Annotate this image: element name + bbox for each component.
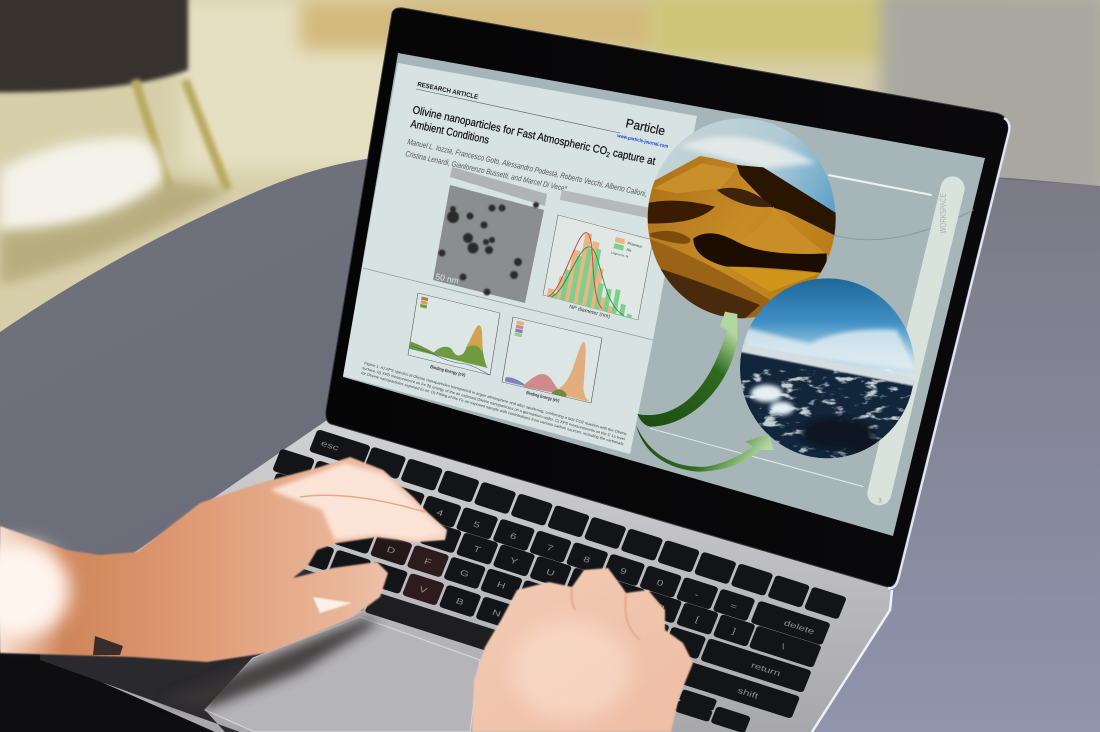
lid silver edge <box>888 118 1009 588</box>
histogram legend: Air <box>626 247 633 253</box>
left hand <box>0 457 447 662</box>
grey placeholder bar left <box>450 167 547 206</box>
table surface <box>0 155 1100 732</box>
authors line 1: Manuel L. Iozzia, Francesco Goto, Alessandro Podestà, Roberto Vecchi, Alberto Calloni, <box>407 137 648 199</box>
XPS chart a axis label: Binding Energy (eV) <box>430 364 466 378</box>
TEM micrograph <box>433 185 544 303</box>
wrist tattoo <box>93 636 123 655</box>
side pill panel: WORKSPACE <box>939 193 948 233</box>
crease line <box>363 268 653 340</box>
top white line <box>828 175 932 195</box>
journal name: Particle <box>624 116 666 138</box>
laptop lid <box>326 8 1008 587</box>
title line 1: 2 <box>606 152 610 159</box>
arm highlight <box>0 542 70 638</box>
ZXCV row <box>293 539 799 718</box>
bottom white line <box>650 428 863 487</box>
thumb light patch <box>313 597 352 613</box>
hand shadow on deck <box>160 618 380 708</box>
number row <box>273 449 830 645</box>
hand highlight <box>510 620 630 720</box>
table dark foreground <box>0 650 240 732</box>
keyboard <box>233 422 846 732</box>
histogram legend: Plasma <box>627 241 643 249</box>
title line 2: Ambient Conditions <box>409 118 491 147</box>
authors line 2: Cristina Lenardi, Gianlorenzo Bussetti, and Marcel Di Vece* <box>405 149 568 194</box>
TEM micrograph: 50 nm <box>435 271 460 286</box>
histogram axis label: NP diameter (nm) <box>569 304 611 320</box>
histogram legend: Lognorm. fit <box>610 251 629 259</box>
histogram legend <box>610 236 643 262</box>
side pill panel: 3 <box>878 498 882 505</box>
green arrow to ocean <box>636 425 774 472</box>
header label: RESEARCH ARTICLE <box>417 81 479 101</box>
size histogram chart <box>543 215 653 320</box>
right hand <box>472 568 693 732</box>
green arrow to desert <box>637 312 737 427</box>
thin curve <box>833 210 973 240</box>
deck right edge highlight <box>812 590 892 732</box>
function row <box>310 430 846 619</box>
fingers highlight <box>270 463 445 540</box>
title line 1: capture at <box>609 147 656 168</box>
decorative graphics on the screen <box>636 113 973 505</box>
figure caption: surface. B) XPS measurement on Fe 2p energy of the air exposed Olivine nanoparticles on a germanium wafer. C) XPS measurements on the C 1s level <box>362 366 625 441</box>
figure caption: Figure 1. A) XPS spectra of Olivine nanoparticles transported in argon atmosphere and after sputtering, confirming a fast CO2 reaction with the Olivine <box>364 361 627 436</box>
article page <box>343 63 697 454</box>
table right side lighter zone <box>780 176 1100 732</box>
trackpad <box>205 617 480 732</box>
header rule <box>416 89 620 133</box>
bottom row <box>275 562 752 732</box>
ASDF row <box>266 501 811 692</box>
XPS chart a <box>408 293 500 375</box>
XPS chart b <box>502 317 602 403</box>
finger crease <box>300 495 425 512</box>
desert circle photo <box>648 118 836 318</box>
QWERTY row <box>269 473 821 667</box>
knuckle shadow <box>571 588 640 640</box>
ocean circle photo <box>737 275 920 463</box>
screen <box>343 53 985 536</box>
side pill panel <box>878 188 953 505</box>
base front dark underside <box>40 650 330 732</box>
background: blurred room <box>0 0 1100 340</box>
title line 1: Olivine nanoparticles for Fast Atmospheric CO <box>411 104 634 163</box>
grey placeholder bar right <box>560 190 650 218</box>
XPS chart b axis label: Binding Energy (eV) <box>526 390 560 403</box>
laptop base deck <box>40 418 892 732</box>
journal url: www.particle-journal.com <box>616 133 669 150</box>
figure caption: for Olivine nanoparticles exposed to air. D) Fitting of the Fe air exposed sample with contributions from various carbon sources, including the carbonate <box>361 371 624 446</box>
